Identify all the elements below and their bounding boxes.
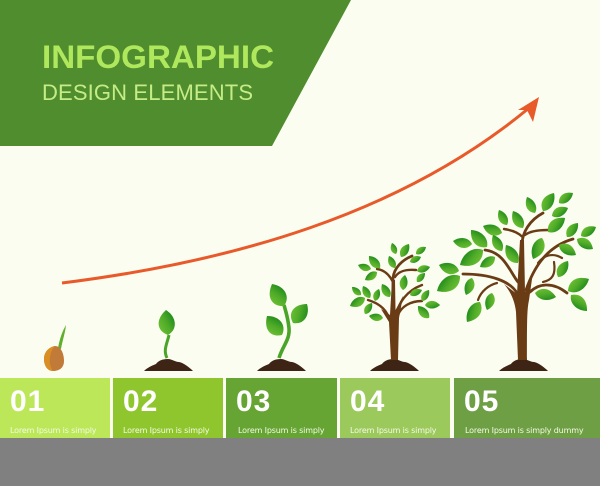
tree 5 leaves: [433, 189, 598, 326]
header banner: [0, 0, 351, 146]
stage 5: mature tree: [433, 189, 598, 371]
panel: step 04: Lorem Ipsum is simply: [350, 426, 436, 435]
panel: step 04: [340, 378, 450, 438]
panel: step 03: [226, 378, 337, 438]
panel: step 03: 03: [236, 385, 271, 418]
panel: step 01: [0, 378, 110, 438]
panel: step 05: 05: [464, 385, 499, 418]
panel: step 05: [454, 378, 600, 438]
title: INFOGRAPHIC: [42, 39, 274, 75]
panel: step 01: 01: [10, 385, 45, 418]
growth arrow: [62, 97, 539, 283]
stage 2: sprout: [144, 309, 193, 371]
panel: step 03: Lorem Ipsum is simply: [238, 426, 324, 435]
subtitle: DESIGN ELEMENTS: [42, 80, 253, 105]
panel: step 04: 04: [350, 385, 385, 418]
panel: step 05: Lorem Ipsum is simply dummy: [465, 426, 583, 435]
panel: step 01: Lorem Ipsum is simply: [10, 426, 96, 435]
panel: step 02: Lorem Ipsum is simply: [123, 426, 209, 435]
tree 4 leaves: [348, 242, 440, 322]
stage 1: seed: [44, 325, 66, 371]
panel: step 02: [113, 378, 223, 438]
stage 3: seedling: [257, 280, 313, 371]
panel: step 02: 02: [123, 385, 158, 418]
grey footer band: [0, 438, 600, 486]
stage 4: young tree: [348, 242, 440, 371]
